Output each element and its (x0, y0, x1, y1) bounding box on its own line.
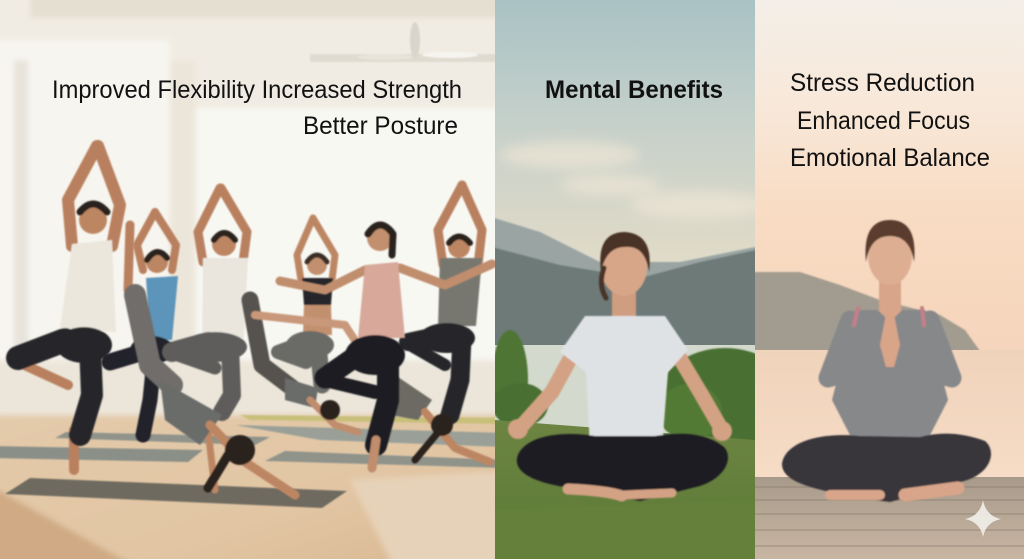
panel: physical benefits yoga studio (0, 0, 515, 559)
panel: mental benefits list, sunrise deck (745, 0, 1024, 559)
text: mental benefits list: Stress Reduction (790, 69, 975, 97)
heading: Mental Benefits: Mental Benefits (545, 76, 723, 104)
figure: woman in pink tank, front centre (280, 225, 492, 468)
figure: woman in blue top (110, 212, 178, 435)
deck (755, 477, 1024, 559)
title: physical benefits list (54, 80, 460, 134)
figure: bending woman in grey, back row (250, 300, 358, 432)
yoga mats (0, 415, 505, 508)
title: physical benefits list: Better Posture (303, 112, 458, 140)
water (495, 345, 755, 435)
figure: seated woman in prayer pose (782, 220, 991, 502)
hills (495, 218, 755, 345)
figure: bending woman in grey, front left (128, 225, 295, 495)
figure: man in grey t-shirt (408, 185, 482, 415)
water (755, 350, 1024, 480)
studio room background (0, 0, 515, 559)
text: mental benefits list (791, 73, 989, 166)
sky (755, 0, 1024, 352)
figure: seated meditating woman (508, 232, 732, 501)
bushes (495, 329, 755, 440)
clouds (500, 141, 770, 219)
grass (495, 420, 755, 510)
icon: ceiling fan (310, 22, 505, 62)
text: mental benefits list: Enhanced Focus (797, 107, 970, 135)
figure: woman in black crop top (278, 218, 335, 385)
title: physical benefits list: Improved Flexibility Increased Strength (52, 76, 462, 104)
figure: bending woman right (390, 375, 490, 462)
headland (745, 272, 980, 351)
figure: man in white t-shirt (172, 188, 248, 412)
figure: man in white tank (18, 146, 120, 470)
sky (495, 0, 755, 262)
panel: mental benefits meditation by the hills (495, 0, 755, 559)
icon: sparkle (965, 500, 1001, 537)
text: mental benefits list: Emotional Balance (790, 144, 990, 172)
